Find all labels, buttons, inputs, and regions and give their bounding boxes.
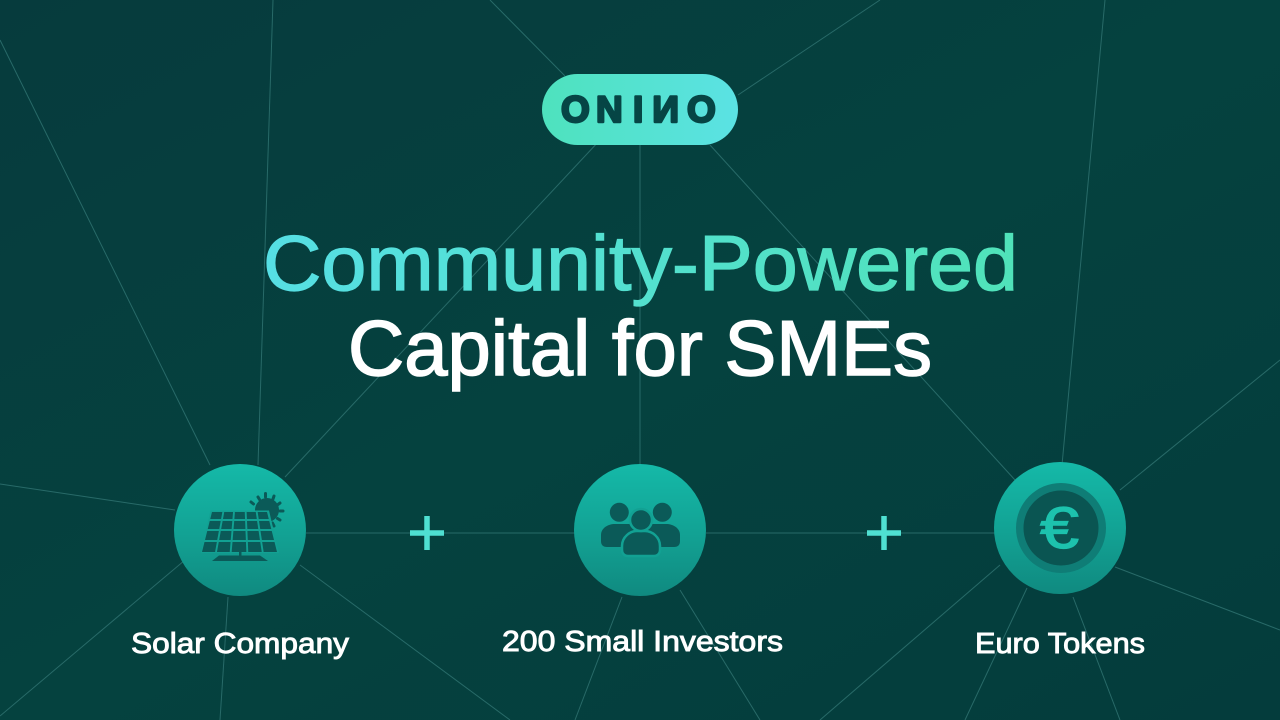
logo: ONINO pill: O: [687, 89, 716, 130]
logo: ONINO pill: N: [652, 89, 679, 130]
item: solar company: [131, 464, 350, 660]
title: [263, 219, 1018, 392]
logo: ONINO pill: I: [633, 89, 643, 130]
item: investors: [502, 464, 783, 658]
logo: ONINO pill: O: [561, 89, 590, 130]
plus sign 2: [867, 516, 901, 550]
icon: euro coin disc: €: [1040, 496, 1079, 561]
logo: ONINO pill: N: [596, 89, 623, 130]
label: 200 Small Investors: [502, 626, 783, 658]
title line 1: Community-Powered: [263, 219, 1018, 307]
item: euro tokens: [975, 462, 1145, 660]
label: Solar Company: [131, 628, 350, 660]
title line 2: Capital for SMEs: [348, 304, 932, 392]
plus sign 1: [410, 516, 444, 550]
icon: people disc: [574, 464, 706, 596]
icon: panel: [201, 510, 279, 561]
icon: sun: [251, 494, 283, 526]
icon: euro coin disc: [994, 462, 1126, 594]
label: Euro Tokens: [975, 628, 1145, 660]
logo: ONINO pill: [542, 74, 738, 145]
icon: solar panel disc: [174, 464, 306, 596]
